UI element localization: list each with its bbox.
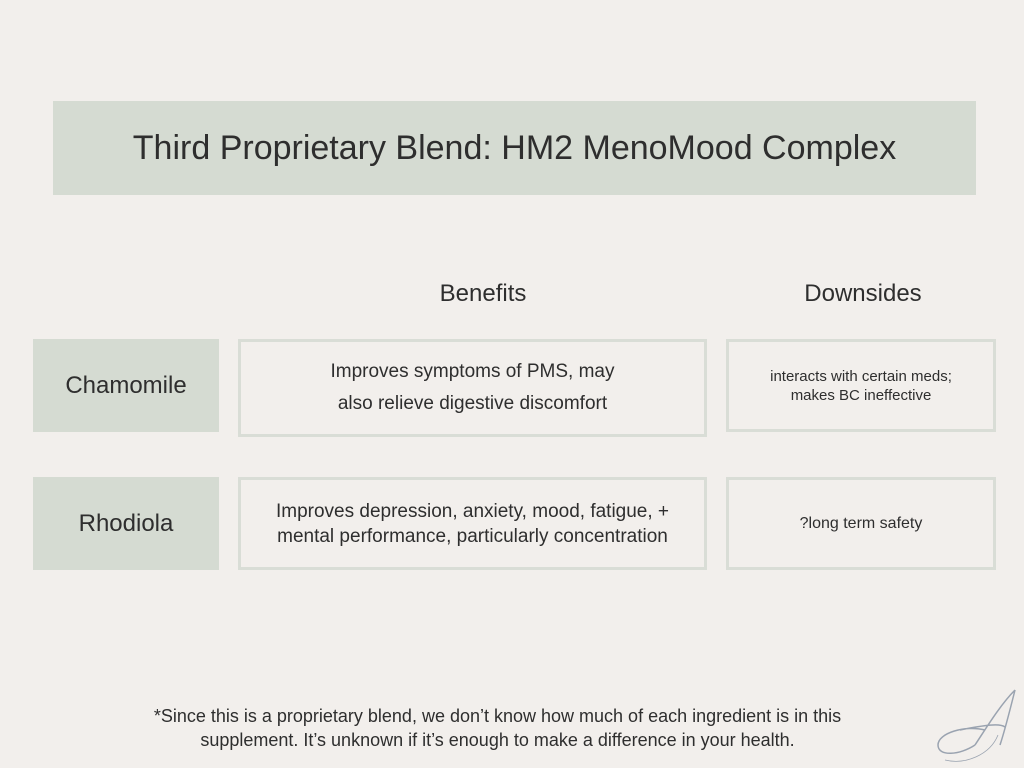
downside: chamomile: interacts with certain meds; [770,368,952,384]
downside: chamomile [726,339,996,432]
row label: rhodiola: Rhodiola [79,510,173,536]
benefit: rhodiola: Improves depression, anxiety, mood, fatigue, + mental performance, particularly concentration [276,500,669,546]
title [53,101,976,195]
row label: chamomile [33,339,219,432]
row label: rhodiola [33,477,219,570]
downside: chamomile: makes BC ineffective [791,386,931,404]
downside: rhodiola: ?long term safety [800,514,922,532]
benefit: rhodiola [238,477,707,570]
downside: rhodiola [726,477,996,570]
icon: logo [937,690,1016,762]
heading: downsides: Downsides [804,280,922,307]
benefit: chamomile [238,339,707,437]
row label: chamomile: Chamomile [65,372,187,398]
footnote: *Since this is a proprietary blend, we don’t know how much of each ingredient is in this supplement. It’s unknown if it’s enough to make a difference in your health. [154,706,841,750]
benefit: chamomile: Improves symptoms of PMS, may also relieve digestive discomfort [330,361,614,414]
heading: benefits: Benefits [440,280,526,307]
title: Third Proprietary Blend: HM2 MenoMood Complex [133,128,896,166]
